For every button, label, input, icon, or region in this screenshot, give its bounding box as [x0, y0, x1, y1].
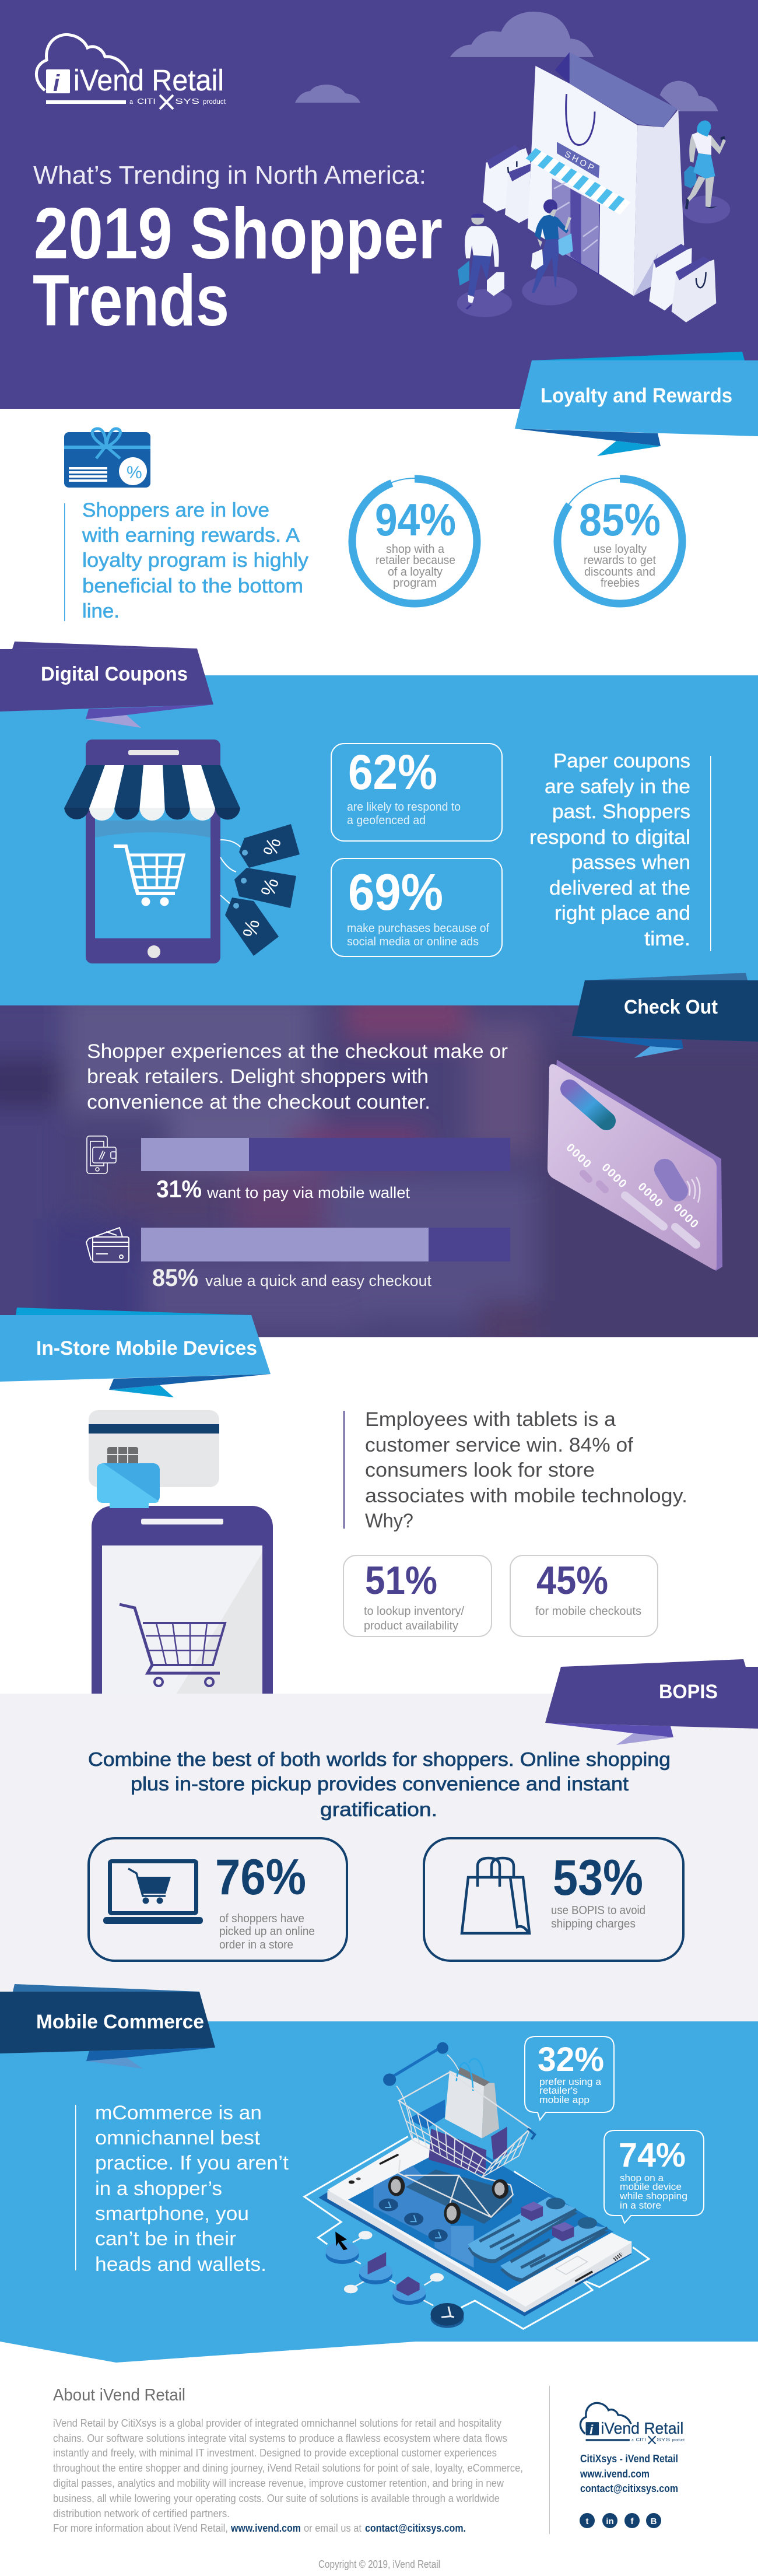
ribbon: Mobile Commerce — [0, 1984, 215, 2069]
stat box: 45% — [510, 1555, 658, 1636]
text: about paragraph: throughout the entire shopper and dining journey, iVend Retail solutions for point of sale, loyalty, eCommerce, — [53, 2462, 523, 2474]
bar: 85% quick checkout: value a quick and easy checkout — [205, 1272, 431, 1289]
logo: iVend Retail: i — [53, 71, 60, 96]
section: check out — [0, 973, 758, 1359]
text: employees intro: Why? — [365, 1510, 413, 1532]
icon: phone storefront — [64, 739, 240, 963]
stat box: 62%: a geofenced ad — [347, 814, 426, 827]
logo: iVend Retail footer: i — [589, 2422, 594, 2437]
icon: phone with card reader and cart — [92, 1463, 273, 1739]
title: Trends — [33, 261, 229, 341]
text: employees intro: associates with mobile technology. — [365, 1485, 687, 1507]
logo: iVend Retail: iVend Retail — [73, 64, 224, 97]
text: digital coupons copy: are safely in the — [545, 776, 690, 798]
stat: 85% ring: 85% — [579, 494, 661, 545]
stat box: 69%: social media or online ads — [347, 935, 479, 948]
callout: 74%: while shopping — [619, 2191, 687, 2202]
logo: iVend Retail footer: iVend Retail — [601, 2419, 683, 2437]
logo: iVend Retail: product — [203, 97, 226, 106]
stat: 94% ring: retailer because — [376, 554, 455, 567]
stat box: 76%: of shoppers have — [219, 1912, 304, 1925]
woman entering store — [532, 239, 564, 293]
callout: 32%: prefer using a — [539, 2076, 602, 2087]
text: digital coupons copy: time. — [644, 928, 690, 950]
title — [33, 194, 443, 341]
stat box: 69% — [331, 858, 502, 956]
text: about paragraph — [53, 2417, 523, 2534]
stat box: 76%: 76% — [215, 1849, 306, 1905]
logo: iVend Retail footer: CITI — [636, 2438, 646, 2442]
ribbon: BOPIS: BOPIS — [659, 1681, 718, 1703]
ribbon: Loyalty and Rewards: Loyalty and Rewards — [541, 384, 732, 407]
icon: discount tags: % — [239, 917, 264, 940]
text: BOPIS intro — [88, 1748, 671, 1820]
text: contact links — [580, 2453, 678, 2494]
logo: iVend Retail: a — [129, 99, 134, 106]
left bags — [483, 148, 531, 212]
stat box: 51%: to lookup inventory/ — [364, 1605, 464, 1618]
text: mCommerce copy: omnichannel best — [95, 2127, 261, 2149]
stat box: 53%: 53% — [553, 1850, 643, 1906]
bar: 85% quick checkout — [141, 1228, 510, 1291]
stat box: 53% — [424, 1838, 683, 1961]
text: about paragraph: www.ivend.com — [230, 2522, 301, 2534]
section: hero — [0, 0, 758, 409]
stat box: 45%: for mobile checkouts — [535, 1605, 641, 1618]
text: checkout intro: convenience at the checkout counter. — [87, 1091, 430, 1113]
ribbon: Digital Coupons: Digital Coupons — [41, 663, 188, 685]
text: about paragraph: or email us at — [304, 2522, 362, 2534]
illustration: isometric credit card: 0000 — [671, 1201, 701, 1231]
bar: 31% mobile wallet: 31% — [156, 1175, 202, 1203]
logo: iVend Retail footer — [580, 2403, 685, 2444]
text: loyalty intro: line. — [82, 600, 120, 622]
icon: cart — [114, 846, 184, 906]
icons: social media — [580, 2513, 661, 2528]
ribbon: BOPIS — [545, 1659, 758, 1745]
stat: 94% ring: program — [393, 577, 437, 590]
text: about paragraph: For more information about iVend Retail, — [53, 2522, 228, 2534]
stat: 94% ring — [352, 478, 478, 604]
icon: gift card: % — [127, 463, 142, 482]
callout: 74%: mobile device — [620, 2181, 682, 2192]
icon: credit cards — [86, 1228, 129, 1262]
stat: 85% ring: discounts and — [584, 566, 655, 579]
text: about paragraph: instantly and freely, with minimal IT investment. Designed to provide exceptional customer experiences — [53, 2447, 497, 2459]
text: contact links: CitiXsys - iVend Retail — [580, 2453, 678, 2465]
text: loyalty intro: beneficial to the bottom — [82, 575, 303, 597]
icons: social media: B — [651, 2517, 657, 2526]
subtitle: What’s Trending in North America: — [33, 161, 426, 190]
stat: 85% ring — [557, 478, 683, 604]
stat box: 69%: 69% — [348, 863, 443, 921]
icon: discount tags: % — [259, 835, 286, 858]
logo: iVend Retail footer: product — [672, 2438, 685, 2442]
door — [552, 178, 599, 274]
shopping cart — [383, 2042, 535, 2224]
text: about paragraph: business, all while lowering your operating costs. Our suite of solutions is available through a worldwide — [53, 2493, 500, 2504]
callout: 74%: 74% — [619, 2136, 686, 2174]
text: loyalty intro: loyalty program is highly — [82, 549, 308, 572]
stat box: 45%: 45% — [536, 1558, 608, 1603]
logo: iVend Retail: SYS — [175, 97, 200, 106]
photo background — [0, 991, 758, 1359]
text: BOPIS intro: gratification. — [320, 1799, 437, 1820]
icon: shopping bag — [462, 1858, 529, 1933]
ribbon: In-Store Mobile Devices: In-Store Mobile Devices — [36, 1337, 257, 1359]
icon: discount tags: % — [257, 875, 283, 899]
callout: 74%: shop on a — [620, 2172, 664, 2184]
text: mCommerce copy: can’t be in their — [95, 2228, 236, 2250]
text: employees intro: consumers look for store — [365, 1459, 595, 1481]
bar: 31% mobile wallet: want to pay via mobile wallet — [206, 1184, 410, 1201]
bag building — [634, 110, 684, 296]
stat box: 76% — [89, 1838, 347, 1961]
ribbon: Check Out: Check Out — [624, 996, 718, 1018]
text: about paragraph: digital passes, analytics and mobility will increase revenue, improve customer retention, and bring in new — [53, 2477, 504, 2489]
text: about paragraph: distribution network of certified partners. — [53, 2508, 230, 2519]
callout: 74%: in a store — [620, 2200, 661, 2211]
illustration: shopping bag store with shoppers: SHOP — [563, 149, 595, 173]
awning — [526, 148, 631, 215]
icon: gift card — [64, 429, 150, 488]
section: in-store mobile devices — [0, 1308, 687, 1739]
logo: iVend Retail footer: SYS — [657, 2438, 671, 2442]
text: digital coupons copy: Paper coupons — [553, 750, 690, 772]
nodes — [326, 2231, 464, 2328]
small cloud — [295, 85, 360, 103]
text: mCommerce copy: in a shopper’s — [95, 2178, 222, 2200]
text: mCommerce copy: heads and wallets. — [95, 2253, 266, 2276]
text: digital coupons copy: right place and — [555, 902, 690, 924]
illustration: isometric phone with cart — [304, 2042, 649, 2329]
text: employees intro — [343, 1408, 687, 1532]
text: about paragraph: iVend Retail by CitiXsys is a global provider of integrated omnichannel solutions for retail and hospitality — [53, 2417, 501, 2429]
text: checkout intro: break retailers. Delight shoppers with — [87, 1066, 429, 1088]
stat box: 62%: are likely to respond to — [347, 801, 461, 814]
text: mCommerce copy: practice. If you aren’t — [95, 2152, 289, 2174]
stat box: 62% — [331, 744, 502, 841]
title: 2019 Shopper — [34, 194, 443, 274]
text: mCommerce copy — [75, 2102, 289, 2276]
text: about paragraph: contact@citixsys.com. — [365, 2522, 466, 2534]
logo: iVend Retail: CITI — [137, 97, 156, 106]
text: loyalty intro — [64, 499, 308, 622]
text: checkout intro: Shopper experiences at the checkout make or — [87, 1040, 508, 1063]
stat: 85% ring: use loyalty — [594, 543, 647, 556]
stat: 94% ring: 94% — [375, 494, 456, 545]
logo: iVend Retail — [36, 34, 226, 109]
ribbon: Digital Coupons — [0, 642, 213, 728]
illustration: isometric credit card: 0000 — [599, 1161, 629, 1190]
stat box: 51%: 51% — [365, 1558, 437, 1603]
text: checkout intro — [87, 1040, 508, 1113]
icon: discount tags — [220, 824, 300, 956]
logo: iVend Retail footer: a — [631, 2439, 634, 2442]
ribbon: In-Store Mobile Devices — [0, 1308, 271, 1397]
callout: 32%: retailer's — [539, 2085, 578, 2096]
stat box: 76%: picked up an online — [219, 1925, 315, 1938]
section: loyalty and rewards — [64, 352, 758, 622]
stat box: 53%: shipping charges — [551, 1918, 636, 1930]
stat box: 69%: make purchases because of — [347, 922, 489, 935]
text: employees intro: customer service win. 84% of — [365, 1434, 634, 1456]
icon: gray credit card — [89, 1410, 219, 1487]
stat box: 53%: use BOPIS to avoid — [551, 1904, 645, 1917]
right woman with phone — [684, 166, 697, 188]
text: digital coupons copy: delivered at the — [549, 877, 690, 899]
text: copyright: Copyright © 2019, iVend Retail — [318, 2559, 440, 2570]
ribbon: Check Out — [572, 973, 758, 1058]
section: BOPIS — [0, 1659, 758, 2021]
callout: 32%: mobile app — [539, 2094, 589, 2105]
stat: 94% ring: shop with a — [386, 543, 445, 556]
text: loyalty intro: with earning rewards. A — [82, 524, 300, 546]
text: BOPIS intro: Combine the best of both worlds for shoppers. Online shopping — [88, 1748, 671, 1770]
callout: 32%: 32% — [538, 2041, 604, 2079]
illustration: isometric credit card: 0000 — [564, 1141, 594, 1170]
stat: 85% ring: freebies — [601, 577, 640, 590]
circuit lines — [304, 2136, 649, 2329]
bar: 31% mobile wallet — [141, 1138, 510, 1203]
clock badges — [379, 2199, 448, 2242]
stat box: 51% — [343, 1555, 492, 1636]
ribbon: Mobile Commerce: Mobile Commerce — [36, 2011, 204, 2033]
icon: purple cart — [120, 1604, 225, 1686]
awning — [64, 765, 240, 821]
text: digital coupons copy: respond to digital — [529, 826, 690, 849]
section: mobile commerce — [0, 1984, 758, 2363]
callout: 32% — [525, 2037, 614, 2120]
section: digital coupons — [0, 642, 758, 1005]
text: digital coupons copy — [529, 750, 711, 951]
text: about paragraph: chains. Our software solutions integrate vital systems to produce a flawless ecosystem where data flows — [53, 2433, 507, 2444]
callout: 74% — [604, 2130, 704, 2223]
text: loyalty intro: Shoppers are in love — [82, 499, 269, 521]
text: digital coupons copy: past. Shoppers — [552, 801, 690, 823]
shop sign — [557, 142, 599, 178]
stat box: 62%: 62% — [348, 745, 437, 800]
list cards — [468, 2197, 609, 2282]
stat: 94% ring: of a loyalty — [388, 566, 443, 579]
icons: social media: f — [631, 2517, 634, 2526]
text: employees intro: Employees with tablets is a — [365, 1408, 616, 1431]
text: contact links: contact@citixsys.com — [580, 2483, 678, 2494]
section: about and footer — [53, 2386, 685, 2570]
illustration: shopping bag store with shoppers — [450, 12, 730, 323]
illustration: isometric credit card — [548, 1060, 722, 1271]
stat box: 76%: order in a store — [219, 1939, 293, 1951]
bar: 85% quick checkout: 85% — [152, 1264, 198, 1291]
right bags — [649, 248, 692, 310]
text: mCommerce copy: smartphone, you — [95, 2203, 249, 2225]
text: contact links: www.ivend.com — [580, 2468, 650, 2480]
icons: social media: t — [585, 2517, 589, 2526]
text: mCommerce copy: mCommerce is an — [95, 2102, 262, 2124]
icons: social media: in — [606, 2517, 614, 2526]
ribbon: Loyalty and Rewards — [515, 352, 758, 456]
heading: About iVend Retail: About iVend Retail — [53, 2386, 185, 2405]
text: digital coupons copy: passes when — [571, 851, 690, 874]
icon: mobile wallet — [87, 1136, 116, 1173]
phone body — [318, 2139, 631, 2316]
stat box: 51%: product availability — [364, 1620, 458, 1632]
illustration: isometric credit card: 0000 — [636, 1180, 665, 1210]
stat: 85% ring: rewards to get — [584, 554, 656, 567]
man with bags — [471, 213, 484, 225]
text: BOPIS intro: plus in-store pickup provides convenience and instant — [131, 1773, 629, 1795]
icon: laptop with cart — [103, 1862, 203, 1924]
